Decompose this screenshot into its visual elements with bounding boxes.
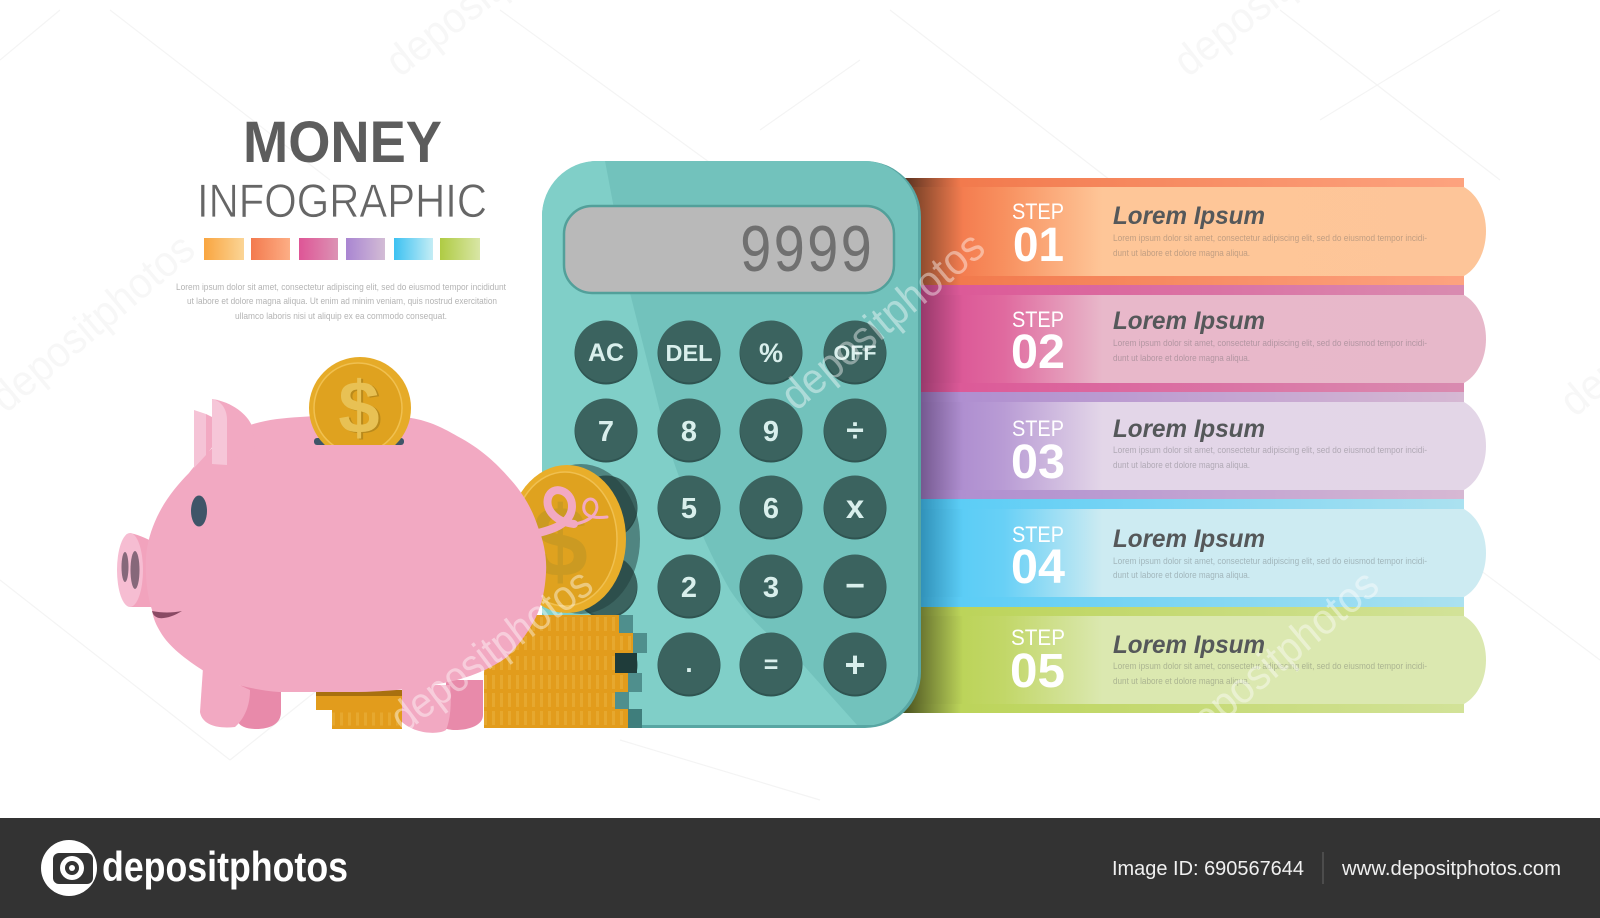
calculator keys: % bbox=[759, 338, 783, 368]
panel: step 05: Lorem ipsum dolor sit amet, consectetur adipiscing elit, sed do eiusmod tempor incidi- bbox=[1113, 661, 1427, 672]
panel: step 05: 05 bbox=[1010, 645, 1065, 698]
panel: step 03: 03 bbox=[1011, 436, 1065, 489]
panel: step 01: Lorem Ipsum bbox=[1113, 202, 1265, 230]
calculator display: 9999 bbox=[739, 215, 873, 292]
watermarks: depositphotos bbox=[772, 222, 994, 420]
pig tail bbox=[534, 490, 607, 534]
panel: step 05: STEP bbox=[1011, 625, 1065, 650]
piggy bank bbox=[117, 399, 607, 733]
image id: Image ID: 690567644 bbox=[1112, 858, 1304, 880]
panel: step 02: STEP bbox=[1012, 307, 1064, 332]
panel: step 05: dunt ut labore et dolore magna aliqua. bbox=[1113, 676, 1250, 687]
panel: step 02: 02 bbox=[1011, 326, 1065, 379]
calculator keys: OFF bbox=[834, 341, 876, 365]
pig mouth bbox=[152, 611, 182, 618]
calculator bbox=[542, 161, 921, 728]
depositphotos logo: depositphotos bbox=[102, 843, 348, 890]
calculator keys: ÷ bbox=[846, 412, 864, 448]
pig snout bbox=[117, 533, 158, 607]
intro paragraph bbox=[176, 282, 506, 322]
panel: step 03: Lorem ipsum dolor sit amet, consectetur adipiscing elit, sed do eiusmod tempor incidi- bbox=[1113, 445, 1427, 456]
calculator keys: DEL bbox=[666, 340, 712, 366]
large coin behind pig bbox=[508, 464, 640, 614]
pig ears bbox=[194, 399, 255, 468]
panel: step 05: Lorem Ipsum bbox=[1113, 631, 1265, 659]
coin entering slot: $ bbox=[340, 367, 382, 450]
coin entering slot: $ bbox=[338, 366, 380, 449]
panel: step 03: dunt ut labore et dolore magna aliqua. bbox=[1113, 460, 1250, 471]
calculator keys: + bbox=[844, 644, 866, 685]
intro paragraph: ut labore et dolore magna aliqua. Ut enim ad minim veniam, quis nostrud exercitation bbox=[187, 296, 497, 307]
pig legs bbox=[200, 668, 483, 733]
pig body bbox=[146, 415, 546, 692]
watermarks: depositphotos bbox=[381, 559, 602, 742]
panel: step 04: 04 bbox=[1011, 541, 1065, 594]
title: INFOGRAPHIC bbox=[197, 174, 487, 227]
calculator keys: − bbox=[845, 567, 865, 605]
footer bar bbox=[0, 818, 1600, 918]
panel: step 01: STEP bbox=[1012, 199, 1064, 224]
panel: step 01 bbox=[900, 178, 1486, 285]
calculator keys: 5 bbox=[681, 493, 697, 525]
calculator keys: 8 bbox=[681, 416, 697, 448]
title bbox=[197, 110, 487, 227]
large coin behind pig: $ bbox=[532, 486, 588, 598]
pig eye bbox=[191, 496, 207, 526]
calculator keys: 3 bbox=[763, 572, 779, 604]
calculator display bbox=[564, 206, 894, 293]
calculator keys: x bbox=[846, 488, 865, 525]
depositphotos logo bbox=[41, 840, 348, 896]
panel: step 01: dunt ut labore et dolore magna aliqua. bbox=[1113, 248, 1250, 259]
title: MONEY bbox=[243, 110, 442, 175]
panel: step 03 bbox=[900, 392, 1486, 499]
colour swatches bbox=[204, 238, 480, 260]
calculator keys: 6 bbox=[763, 493, 779, 525]
calculator keys: 9 bbox=[763, 416, 779, 448]
panel: step 02: Lorem ipsum dolor sit amet, consectetur adipiscing elit, sed do eiusmod tempor incidi- bbox=[1113, 338, 1427, 349]
calculator keys: 2 bbox=[681, 572, 697, 604]
panel: step 02 bbox=[900, 285, 1486, 392]
panel: step 04: Lorem Ipsum bbox=[1113, 525, 1265, 553]
coin entering slot bbox=[309, 357, 411, 445]
coin stack: right bbox=[484, 615, 647, 728]
panel: step 02: Lorem Ipsum bbox=[1113, 307, 1265, 335]
panel: step 05 bbox=[900, 607, 1486, 713]
panel: step 02: dunt ut labore et dolore magna aliqua. bbox=[1113, 353, 1250, 364]
pig slot bbox=[314, 438, 404, 445]
calculator keys: = bbox=[764, 651, 778, 679]
panel: step 04: dunt ut labore et dolore magna aliqua. bbox=[1113, 570, 1250, 581]
intro paragraph: ullamco laboris nisi ut aliquip ex ea commodo consequat. bbox=[235, 311, 447, 322]
panel: step 01: 01 bbox=[1013, 219, 1064, 272]
panel: step 03: Lorem Ipsum bbox=[1113, 415, 1265, 443]
panel: step 03: STEP bbox=[1012, 416, 1064, 441]
watermarks: depositphotos bbox=[1166, 560, 1388, 758]
calculator keys: AC bbox=[588, 339, 624, 367]
panel: step 04: STEP bbox=[1012, 522, 1064, 547]
intro paragraph: Lorem ipsum dolor sit amet, consectetur adipiscing elit, sed do eiusmod tempor incididunt bbox=[176, 282, 506, 293]
panel: step 04 bbox=[900, 499, 1486, 607]
panel: step 01: Lorem ipsum dolor sit amet, consectetur adipiscing elit, sed do eiusmod tempor incidi- bbox=[1113, 233, 1427, 244]
website: www.depositphotos.com bbox=[1341, 858, 1561, 880]
calculator keys bbox=[574, 320, 886, 696]
calculator keys: 7 bbox=[598, 416, 614, 448]
panel: step 04: Lorem ipsum dolor sit amet, consectetur adipiscing elit, sed do eiusmod tempor incidi- bbox=[1113, 556, 1427, 567]
calculator keys: . bbox=[685, 648, 693, 678]
coin stack: under pig bbox=[316, 690, 402, 729]
